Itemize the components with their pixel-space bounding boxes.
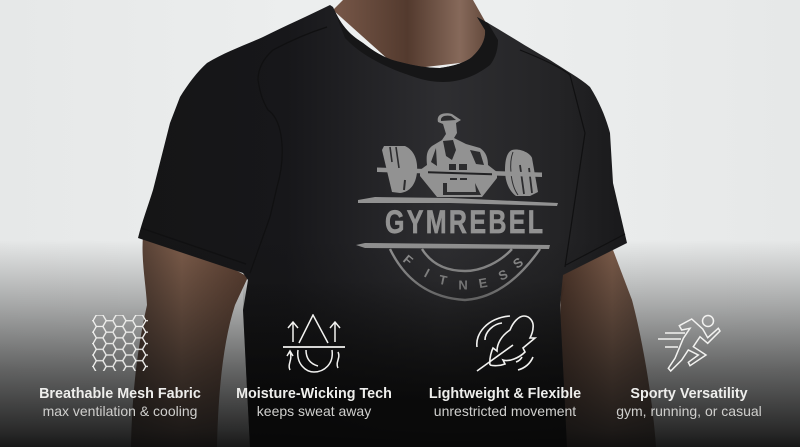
label: moisture-wicking tech: keeps sweat away [257, 403, 371, 419]
lifter figure [420, 113, 497, 197]
logo arc text: S [496, 266, 510, 284]
feature 1 [39, 315, 201, 419]
barbell [377, 168, 542, 177]
label: lightweight and flexible [429, 386, 581, 419]
icon: feather [476, 315, 537, 372]
icon: hexagon mesh [92, 315, 148, 371]
logo arc text: E [477, 275, 489, 291]
bottom dark gradient [0, 240, 800, 447]
shirt lower shadow [243, 280, 567, 447]
icon: sprinting figure [658, 314, 721, 372]
upper band [358, 197, 558, 206]
logo arc text: S [510, 254, 526, 272]
logo arc text: N [458, 278, 468, 292]
right plates [505, 150, 538, 196]
feature 2 [236, 314, 392, 419]
label: lightweight and flexible: unrestricted movement [434, 403, 576, 419]
label: lightweight and flexible: Lightweight & Flexible [429, 386, 581, 402]
logo arc text [400, 252, 526, 292]
logo lower arc [390, 249, 540, 300]
label: sporty versatility: Sporty Versatility [630, 386, 748, 402]
label: sporty versatility: gym, running, or casual [616, 403, 762, 419]
logo arc text: T [438, 272, 448, 288]
logo wordmark: GYMREBEL [385, 205, 543, 241]
neck [333, 0, 490, 70]
right arm [560, 250, 656, 447]
lower band [356, 243, 550, 249]
logo arc text: I [422, 266, 432, 280]
label: moisture-wicking tech [236, 386, 392, 419]
feature 3 [429, 315, 581, 419]
icon: moisture drop with arrows [283, 314, 345, 373]
shirt seams [141, 27, 625, 273]
label: breathable mesh fabric [39, 386, 201, 419]
t-shirt [138, 5, 627, 447]
left plates [382, 146, 417, 193]
collar band [333, 7, 498, 82]
feature 4 [616, 314, 762, 419]
label: sporty versatility [616, 386, 762, 419]
logo: weightlifter emblem [356, 113, 558, 249]
label: breathable mesh fabric: max ventilation & cooling [43, 403, 197, 419]
left arm [131, 236, 248, 447]
label: moisture-wicking tech: Moisture-Wicking Tech [236, 386, 392, 402]
label: breathable mesh fabric: Breathable Mesh Fabric [39, 386, 201, 402]
logo arc text: F [400, 252, 416, 268]
